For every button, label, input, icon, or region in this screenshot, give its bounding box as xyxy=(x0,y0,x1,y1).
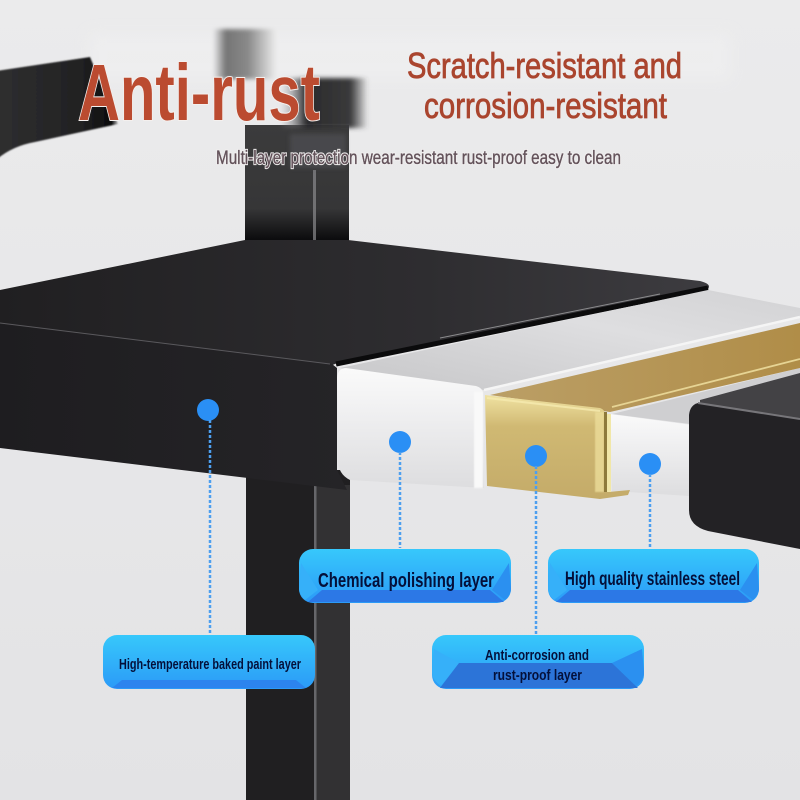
soft text backdrop xyxy=(90,34,730,80)
title: Anti-rust xyxy=(78,48,320,137)
subtitle: Multi-layer protection wear-resistant rust-proof easy to clean xyxy=(216,148,621,169)
curved arm xyxy=(0,57,118,160)
black outer shelf xyxy=(0,240,709,490)
chemical polishing layer: white front xyxy=(337,368,484,488)
label: chemical polishing layer: Chemical polishing layer xyxy=(318,570,494,592)
connector: polishing layer xyxy=(389,431,411,548)
label: anti-corrosion and rust-proof layer: rust-proof layer xyxy=(493,668,582,684)
silver top surface xyxy=(340,290,800,390)
connector: paint layer xyxy=(197,399,219,636)
upper post xyxy=(213,29,368,241)
lower leg xyxy=(246,470,350,800)
label: chemical polishing layer xyxy=(299,549,511,603)
heading xyxy=(407,45,682,126)
gold top surface xyxy=(490,323,800,412)
heading: corrosion-resistant xyxy=(424,85,667,126)
label: high-temperature baked paint layer: High-temperature baked paint layer xyxy=(119,657,301,673)
label: high quality stainless steel xyxy=(548,549,759,603)
connector: stainless steel xyxy=(639,453,661,548)
label: high-temperature baked paint layer xyxy=(103,635,315,689)
connector: anti-corrosion layer xyxy=(525,445,547,636)
label: anti-corrosion and rust-proof layer: Anti-corrosion and xyxy=(485,648,589,664)
label: anti-corrosion and rust-proof layer xyxy=(432,635,644,689)
right dark block xyxy=(689,373,800,549)
subtitle: Multi-layer protection wear-resistant rust-proof easy to clean xyxy=(216,148,621,169)
lower gray surface xyxy=(612,368,800,424)
third layer: stainless steel front xyxy=(610,414,692,496)
gold front xyxy=(485,395,630,499)
heading: Scratch-resistant and xyxy=(407,45,682,86)
